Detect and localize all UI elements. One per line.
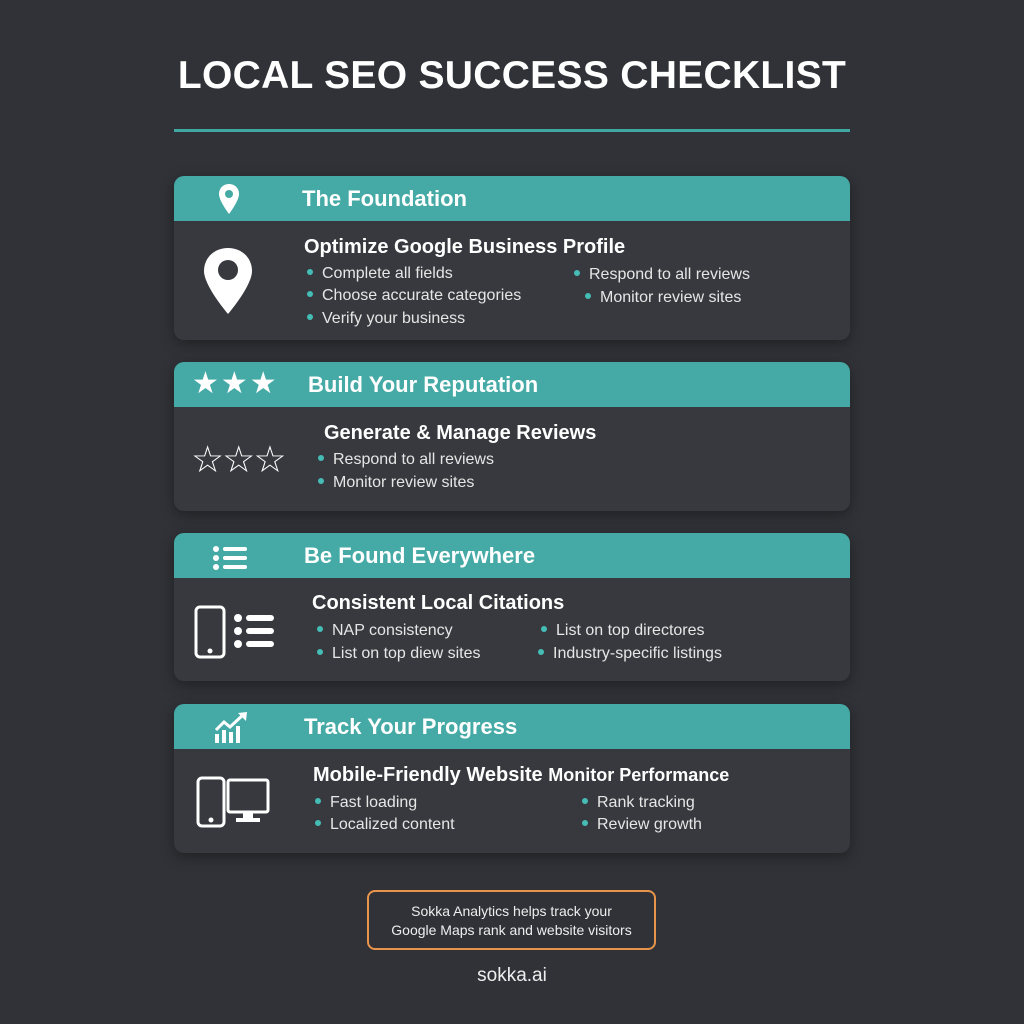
panel: citations	[174, 533, 850, 681]
icon: map pin	[204, 248, 252, 314]
icon: outline stars: ☆☆☆	[191, 439, 285, 480]
callout: Google Maps rank and website visitors	[391, 922, 632, 938]
subheading: Optimize Google Business Profile	[304, 236, 625, 258]
header: progress: Track Your Progress	[304, 714, 517, 739]
callout: Sokka Analytics helps track your	[411, 903, 612, 919]
header: citations: Be Found Everywhere	[304, 543, 535, 568]
panel: foundation: Choose accurate categories	[322, 287, 521, 304]
panel: foundation	[174, 176, 850, 340]
panel: progress: Rank tracking	[597, 794, 695, 811]
panel: citations: Industry-specific listings	[553, 645, 722, 662]
panel: foundation: Respond to all reviews	[589, 266, 750, 283]
panel: foundation: Complete all fields	[322, 265, 453, 282]
panel: citations: NAP consistency	[332, 622, 453, 639]
panel: reputation: Respond to all reviews	[333, 451, 494, 468]
panel: reputation: Generate & Manage Reviews	[324, 422, 596, 444]
panel: reputation: Monitor review sites	[333, 474, 474, 491]
panel: citations: List on top diew sites	[332, 645, 481, 662]
callout	[367, 890, 656, 950]
panel: foundation: Monitor review sites	[600, 289, 741, 306]
header: reputation	[174, 362, 850, 407]
footer url: sokka.ai	[477, 965, 547, 986]
header: reputation: Build Your Reputation	[308, 372, 538, 397]
panel: citations: List on top directores	[556, 622, 705, 639]
panel: reputation	[174, 362, 850, 511]
header: citations	[174, 533, 850, 578]
icon: devices	[196, 776, 270, 828]
panel: progress	[174, 704, 850, 853]
header: foundation: The Foundation	[302, 186, 467, 211]
header: progress	[174, 704, 850, 749]
panel: foundation: Verify your business	[322, 310, 465, 327]
icon: phone list	[194, 606, 274, 658]
title: LOCAL SEO SUCCESS CHECKLIST	[178, 54, 846, 97]
header: foundation	[174, 176, 850, 221]
panel: progress: Fast loading	[330, 794, 417, 811]
panel: progress: Localized content	[330, 816, 455, 833]
panel: citations: Consistent Local Citations	[312, 592, 564, 614]
header: reputation: ★★★	[192, 367, 279, 400]
panel: progress: Mobile-Friendly Website Monitor Performance	[313, 764, 729, 786]
panel: progress: Review growth	[597, 816, 702, 833]
